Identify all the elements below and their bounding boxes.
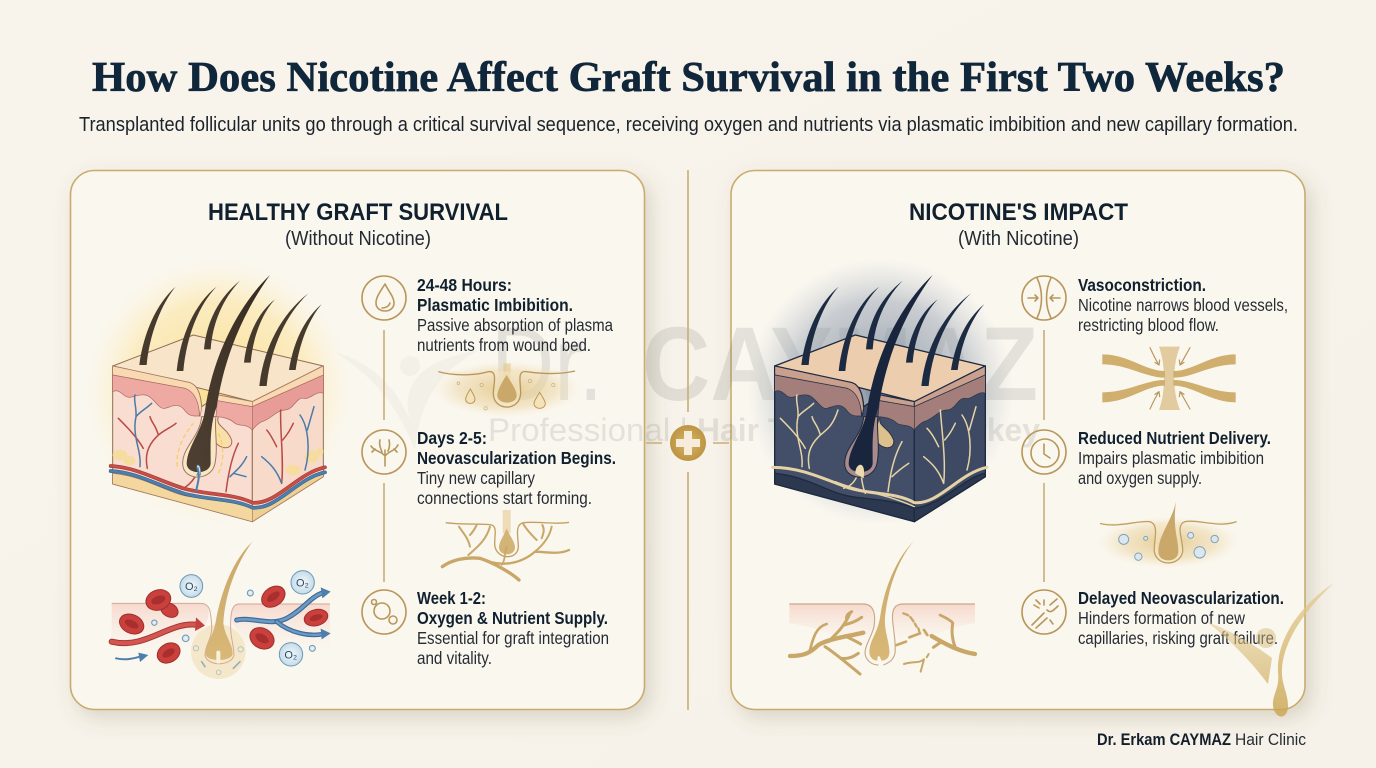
illustration: new capillaries [442, 510, 569, 580]
illustration: oxygen and blood flow [112, 542, 331, 679]
step text: Days 2-5: [417, 428, 487, 448]
step text: Week 1-2: [417, 588, 486, 608]
heading: healthy [208, 199, 508, 250]
step text: Passive absorption of plasma [417, 315, 613, 335]
step text [1078, 428, 1271, 488]
heading: healthy: HEALTHY GRAFT SURVIVAL [208, 199, 508, 226]
subtitle: Transplanted follicular units go through a critical survival sequence, receiving oxygen and nutrients via plasmatic imbibition and new capillary formation. [79, 114, 1298, 136]
step text [1078, 275, 1288, 335]
icon: clock [1022, 430, 1066, 474]
illustration: nicotine skin block [747, 258, 1014, 525]
step text: Neovascularization Begins. [417, 448, 616, 468]
watermark: CAYMAZ [642, 306, 1038, 423]
step text [1078, 588, 1284, 648]
title: How Does Nicotine Affect Graft Survival in the First Two Weeks? [92, 55, 1285, 101]
step text: capillaries, risking graft failure. [1078, 628, 1278, 648]
footer: clinic credit: Hair Clinic [1235, 730, 1306, 749]
illustration: oxygen and blood flow: O₂ [185, 581, 198, 593]
step text: Hinders formation of new [1078, 608, 1245, 628]
panel: healthy card background [70, 170, 644, 710]
step text [417, 428, 616, 508]
heading: healthy: (Without Nicotine) [285, 228, 431, 250]
icon: broken vessel [1022, 590, 1066, 634]
icon: bubbles [362, 590, 406, 634]
logo mark: gold hair V [1207, 583, 1334, 716]
illustration: oxygen and blood flow: O₂ [296, 577, 309, 589]
step text: and vitality. [417, 648, 492, 668]
watermark: Hair Transplant Turkey [697, 412, 1040, 448]
illustration: reduced nutrients [1097, 502, 1240, 568]
step text: and oxygen supply. [1078, 468, 1202, 488]
step text: Delayed Neovascularization. [1078, 588, 1284, 608]
icon: drop [362, 276, 406, 320]
step: oxygen supply [362, 588, 609, 668]
step text: 24-48 Hours: [417, 275, 512, 295]
heading: nicotine [909, 199, 1128, 250]
panel: nicotine card background [731, 170, 1305, 710]
step text [417, 588, 609, 668]
watermark: Professional | [488, 412, 688, 448]
step text: Vasoconstriction. [1078, 275, 1206, 295]
step text: Reduced Nutrient Delivery. [1078, 428, 1271, 448]
step text: Plasmatic Imbibition. [417, 295, 573, 315]
illustration: constricted vessels [1102, 347, 1236, 410]
step text: Impairs plasmatic imbibition [1078, 448, 1264, 468]
watermark [335, 306, 1040, 450]
step text: Oxygen & Nutrient Supply. [417, 608, 608, 628]
step text: nutrients from wound bed. [417, 335, 591, 355]
step: reduced nutrient delivery [1022, 428, 1271, 582]
step: delayed neovascularization [1022, 588, 1284, 648]
step text: Essential for graft integration [417, 628, 609, 648]
icon: narrowing vessel [1022, 276, 1066, 320]
illustration: plasma absorption [432, 361, 582, 417]
step text: restricting blood flow. [1078, 315, 1219, 335]
heading: nicotine: NICOTINE'S IMPACT [909, 199, 1128, 226]
illustration: healthy skin block [85, 258, 352, 525]
step: plasmatic imbibition [362, 275, 613, 420]
footer: clinic credit: Dr. Erkam CAYMAZ [1097, 730, 1231, 749]
step text: connections start forming. [417, 488, 592, 508]
watermark: Dr. [491, 306, 603, 423]
illustration: broken capillaries [789, 542, 975, 674]
step text [417, 275, 613, 355]
illustration: oxygen and blood flow: O₂ [284, 649, 297, 661]
divider with plus badge [646, 170, 729, 710]
step text: Nicotine narrows blood vessels, [1078, 295, 1288, 315]
heading: nicotine: (With Nicotine) [958, 228, 1079, 250]
icon: branch [362, 430, 406, 474]
step: neovascularization [362, 428, 616, 582]
step text: Tiny new capillary [417, 468, 535, 488]
step: vasoconstriction [1022, 275, 1288, 420]
